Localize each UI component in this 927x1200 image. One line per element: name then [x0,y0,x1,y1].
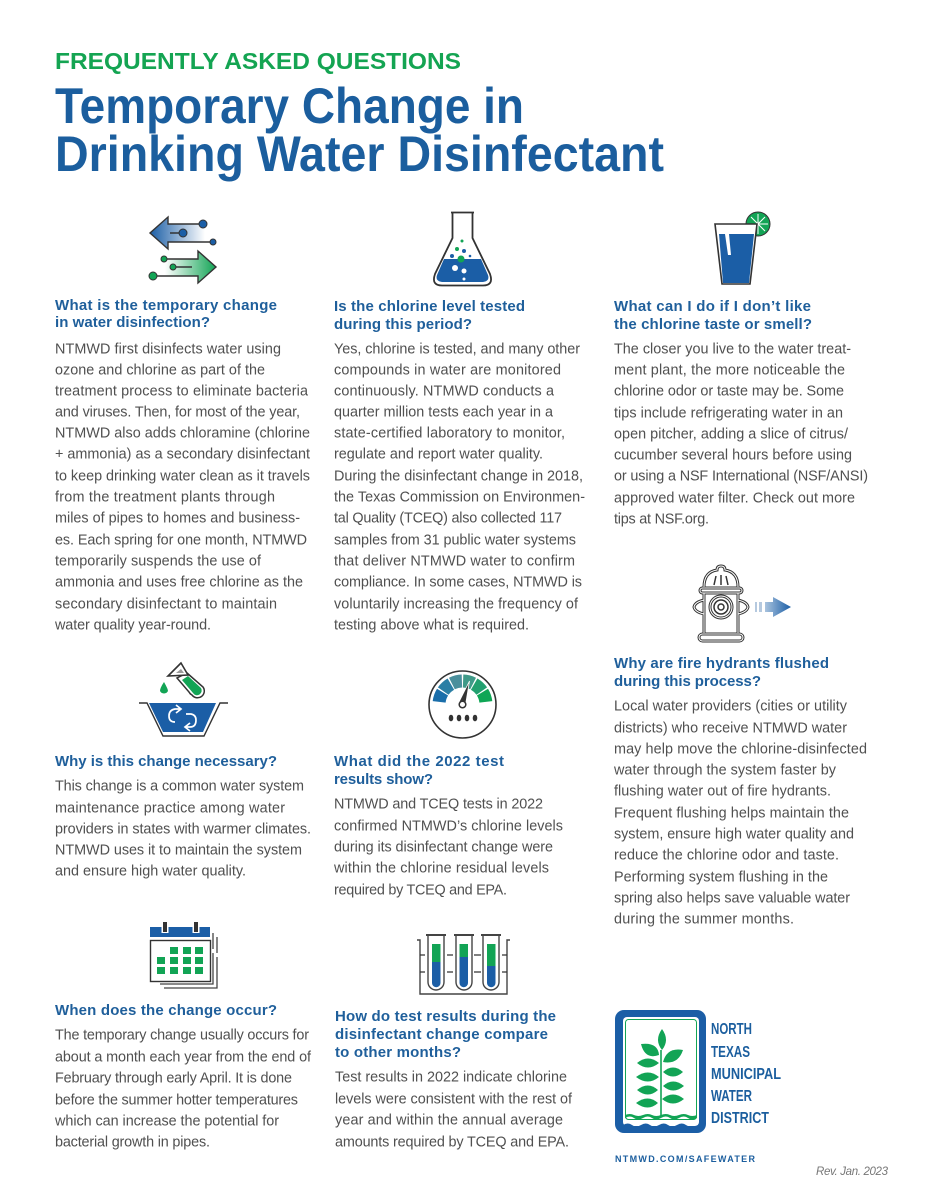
question: taste or smell: open pitcher, adding a slice of citrus/ [614,427,848,443]
question: why necessary: providers in states with warmer climates. [55,822,311,838]
question: hydrants flushed: water through the system faster by [613,763,837,779]
question: hydrants flushed: districts) who receive NTMWD water [614,721,847,737]
question: chlorine tested: regulate and report water quality. [334,447,543,463]
question: compare: How do test results during the [335,1008,556,1025]
question: 2022 results: results show? [334,771,433,788]
question: temporary change: NTMWD first disinfects water using [55,342,281,358]
logo: NTMWD [615,1010,781,1133]
question: compare: Test results in 2022 indicate chlorine [335,1070,567,1086]
question: chlorine tested: testing above what is required. [334,618,529,634]
question: taste or smell: approved water filter. Check out more [614,491,855,507]
question: why necessary: Why is this change necessary? [55,753,277,770]
icon: exchange arrows [149,217,216,283]
title [55,78,664,182]
question: chlorine tested: that deliver NTMWD water to confirm [334,554,575,570]
question: 2022 results: required by TCEQ and EPA. [334,883,507,899]
question: when: about a month each year from the end of [55,1050,312,1066]
question: hydrants flushed: flushing water out of fire hydrants. [614,784,831,800]
question: 2022 results: NTMWD and TCEQ tests in 2022 [334,797,543,813]
question: temporary change: treatment process to eliminate bacteria [55,384,308,400]
title: Temporary Change in [55,78,524,134]
icon: gauge [429,671,496,738]
question: hydrants flushed: may help move the chlorine-disinfected [614,742,867,758]
question: taste or smell: cucumber several hours before using [614,448,852,464]
question: compare: to other months? [335,1044,461,1061]
question: taste or smell: chlorine odor or taste may be. Some [614,384,844,400]
question: hydrants flushed: Why are fire hydrants flushed [614,655,829,672]
question: when [54,1002,312,1151]
logo: NTMWD: MUNICIPAL [711,1066,781,1083]
question: hydrants flushed [613,655,867,928]
question: chlorine tested: voluntarily increasing the frequency of [334,597,579,613]
question: why necessary: and ensure high water quality. [55,864,246,880]
question: temporary change: + ammonia) as a secondary disinfectant [55,447,310,463]
question: when: The temporary change usually occurs for [55,1028,309,1044]
question: temporary change: ammonia and uses free chlorine as the [55,575,303,591]
question: 2022 results [333,753,563,899]
question: temporary change: in water disinfection? [55,314,210,331]
question: when: bacterial growth in pipes. [55,1135,210,1151]
question: temporary change [54,297,310,634]
arrow: flush direction [755,597,791,617]
question: taste or smell: ment plant, the more noticeable the [614,363,845,379]
question: compare: disinfectant change compare [335,1026,548,1043]
question: chlorine tested: samples from 31 public water systems [334,533,576,549]
question: temporary change: miles of pipes to homes and business- [55,511,300,527]
logo: NTMWD: NORTH [711,1021,752,1038]
question: chlorine tested: Is the chlorine level tested [334,298,525,315]
website: NTMWD.COM/SAFEWATER [615,1154,756,1164]
icon: glass with citrus [715,212,770,284]
question: temporary change: ozone and chlorine as part of the [55,363,265,379]
question: hydrants flushed: during this process? [614,673,761,690]
question: hydrants flushed: during the summer months. [614,912,794,928]
question: taste or smell: tips include refrigerating water in an [614,406,843,422]
icon: flask [434,212,491,286]
question: when: When does the change occur? [55,1002,277,1019]
logo: NTMWD: TEXAS [711,1044,750,1061]
question: temporary change: water quality year-round. [54,618,211,634]
question: temporary change: What is the temporary change [55,297,277,314]
question: why necessary: This change is a common water system [55,779,304,795]
question: hydrants flushed: Local water providers (cities or utility [614,699,848,715]
question: temporary change: from the treatment plants through [55,490,275,506]
question: chlorine tested: tal Quality (TCEQ) also collected 117 [334,511,562,527]
question: taste or smell: or using a NSF International (NSF/ANSI) [614,469,868,485]
question: hydrants flushed: reduce the chlorine odor and taste. [614,848,839,864]
question: compare [335,1008,573,1151]
logo: NTMWD: WATER [711,1088,752,1105]
question: taste or smell: tips at NSF.org. [614,512,709,528]
logo: NTMWD: DISTRICT [711,1110,769,1127]
title: Drinking Water Disinfectant [55,126,664,182]
icon: calendar [150,921,217,988]
question: temporary change: to keep drinking water clean as it travels [55,469,310,485]
question: chlorine tested: Yes, chlorine is tested, and many other [334,342,580,358]
question: 2022 results: during its disinfectant change were [334,840,553,856]
question: temporary change: es. Each spring for one month, NTMWD [55,533,307,549]
question: 2022 results: within the chlorine residual levels [333,861,549,877]
question: hydrants flushed: Performing system flushing in the [614,870,828,886]
icon: basin with test tube [139,663,228,736]
question: 2022 results: What did the 2022 test [334,753,504,770]
eyebrow heading: FREQUENTLY ASKED QUESTIONS [55,48,461,74]
question: chlorine tested: compounds in water are monitored [334,363,561,379]
question: temporary change: secondary disinfectant to maintain [55,597,277,613]
question: taste or smell: the chlorine taste or smell? [614,316,812,333]
icon: test tubes [417,935,510,994]
question: chlorine tested: During the disinfectant change in 2018, [334,469,583,485]
revision date: Rev. Jan. 2023 [816,1166,889,1178]
question: why necessary [55,753,311,880]
question: when: which can increase the potential for [54,1114,279,1130]
question: taste or smell: What can I do if I don’t like [614,298,811,315]
question: chlorine tested: continuously. NTMWD conducts a [334,384,554,400]
question: compare: year and within the annual average [335,1113,563,1129]
question: why necessary: maintenance practice among water [55,801,285,817]
question: chlorine tested [334,298,585,634]
question: when: before the summer hotter temperatures [55,1093,298,1109]
question: hydrants flushed: system, ensure high water quality and [614,827,854,843]
question: 2022 results: confirmed NTMWD’s chlorine levels [334,819,563,835]
question: hydrants flushed: spring also helps save valuable water [614,891,850,907]
question: hydrants flushed: Frequent flushing helps maintain the [614,806,849,822]
question: temporary change: and viruses. Then, for most of the year, [55,405,300,421]
question: taste or smell [614,298,868,528]
question: chlorine tested: during this period? [334,316,472,333]
icon: fire hydrant [694,566,748,641]
question: chlorine tested: the Texas Commission on Environmen- [334,490,585,506]
question: temporary change: NTMWD also adds chloramine (chlorine [55,426,310,442]
question: compare: levels were consistent with the rest of [335,1092,573,1108]
question: chlorine tested: quarter million tests each year in a [334,405,553,421]
question: taste or smell: The closer you live to the water treat- [614,342,851,358]
question: chlorine tested: compliance. In some cases, NTMWD is [334,575,582,591]
question: why necessary: NTMWD uses it to maintain the system [55,843,302,859]
question: temporary change: temporarily suspends the use of [55,554,262,570]
question: compare: amounts required by TCEQ and EPA. [335,1135,569,1151]
question: when: February through early April. It is done [55,1071,292,1087]
question: chlorine tested: state-certified laboratory to monitor, [334,426,565,442]
